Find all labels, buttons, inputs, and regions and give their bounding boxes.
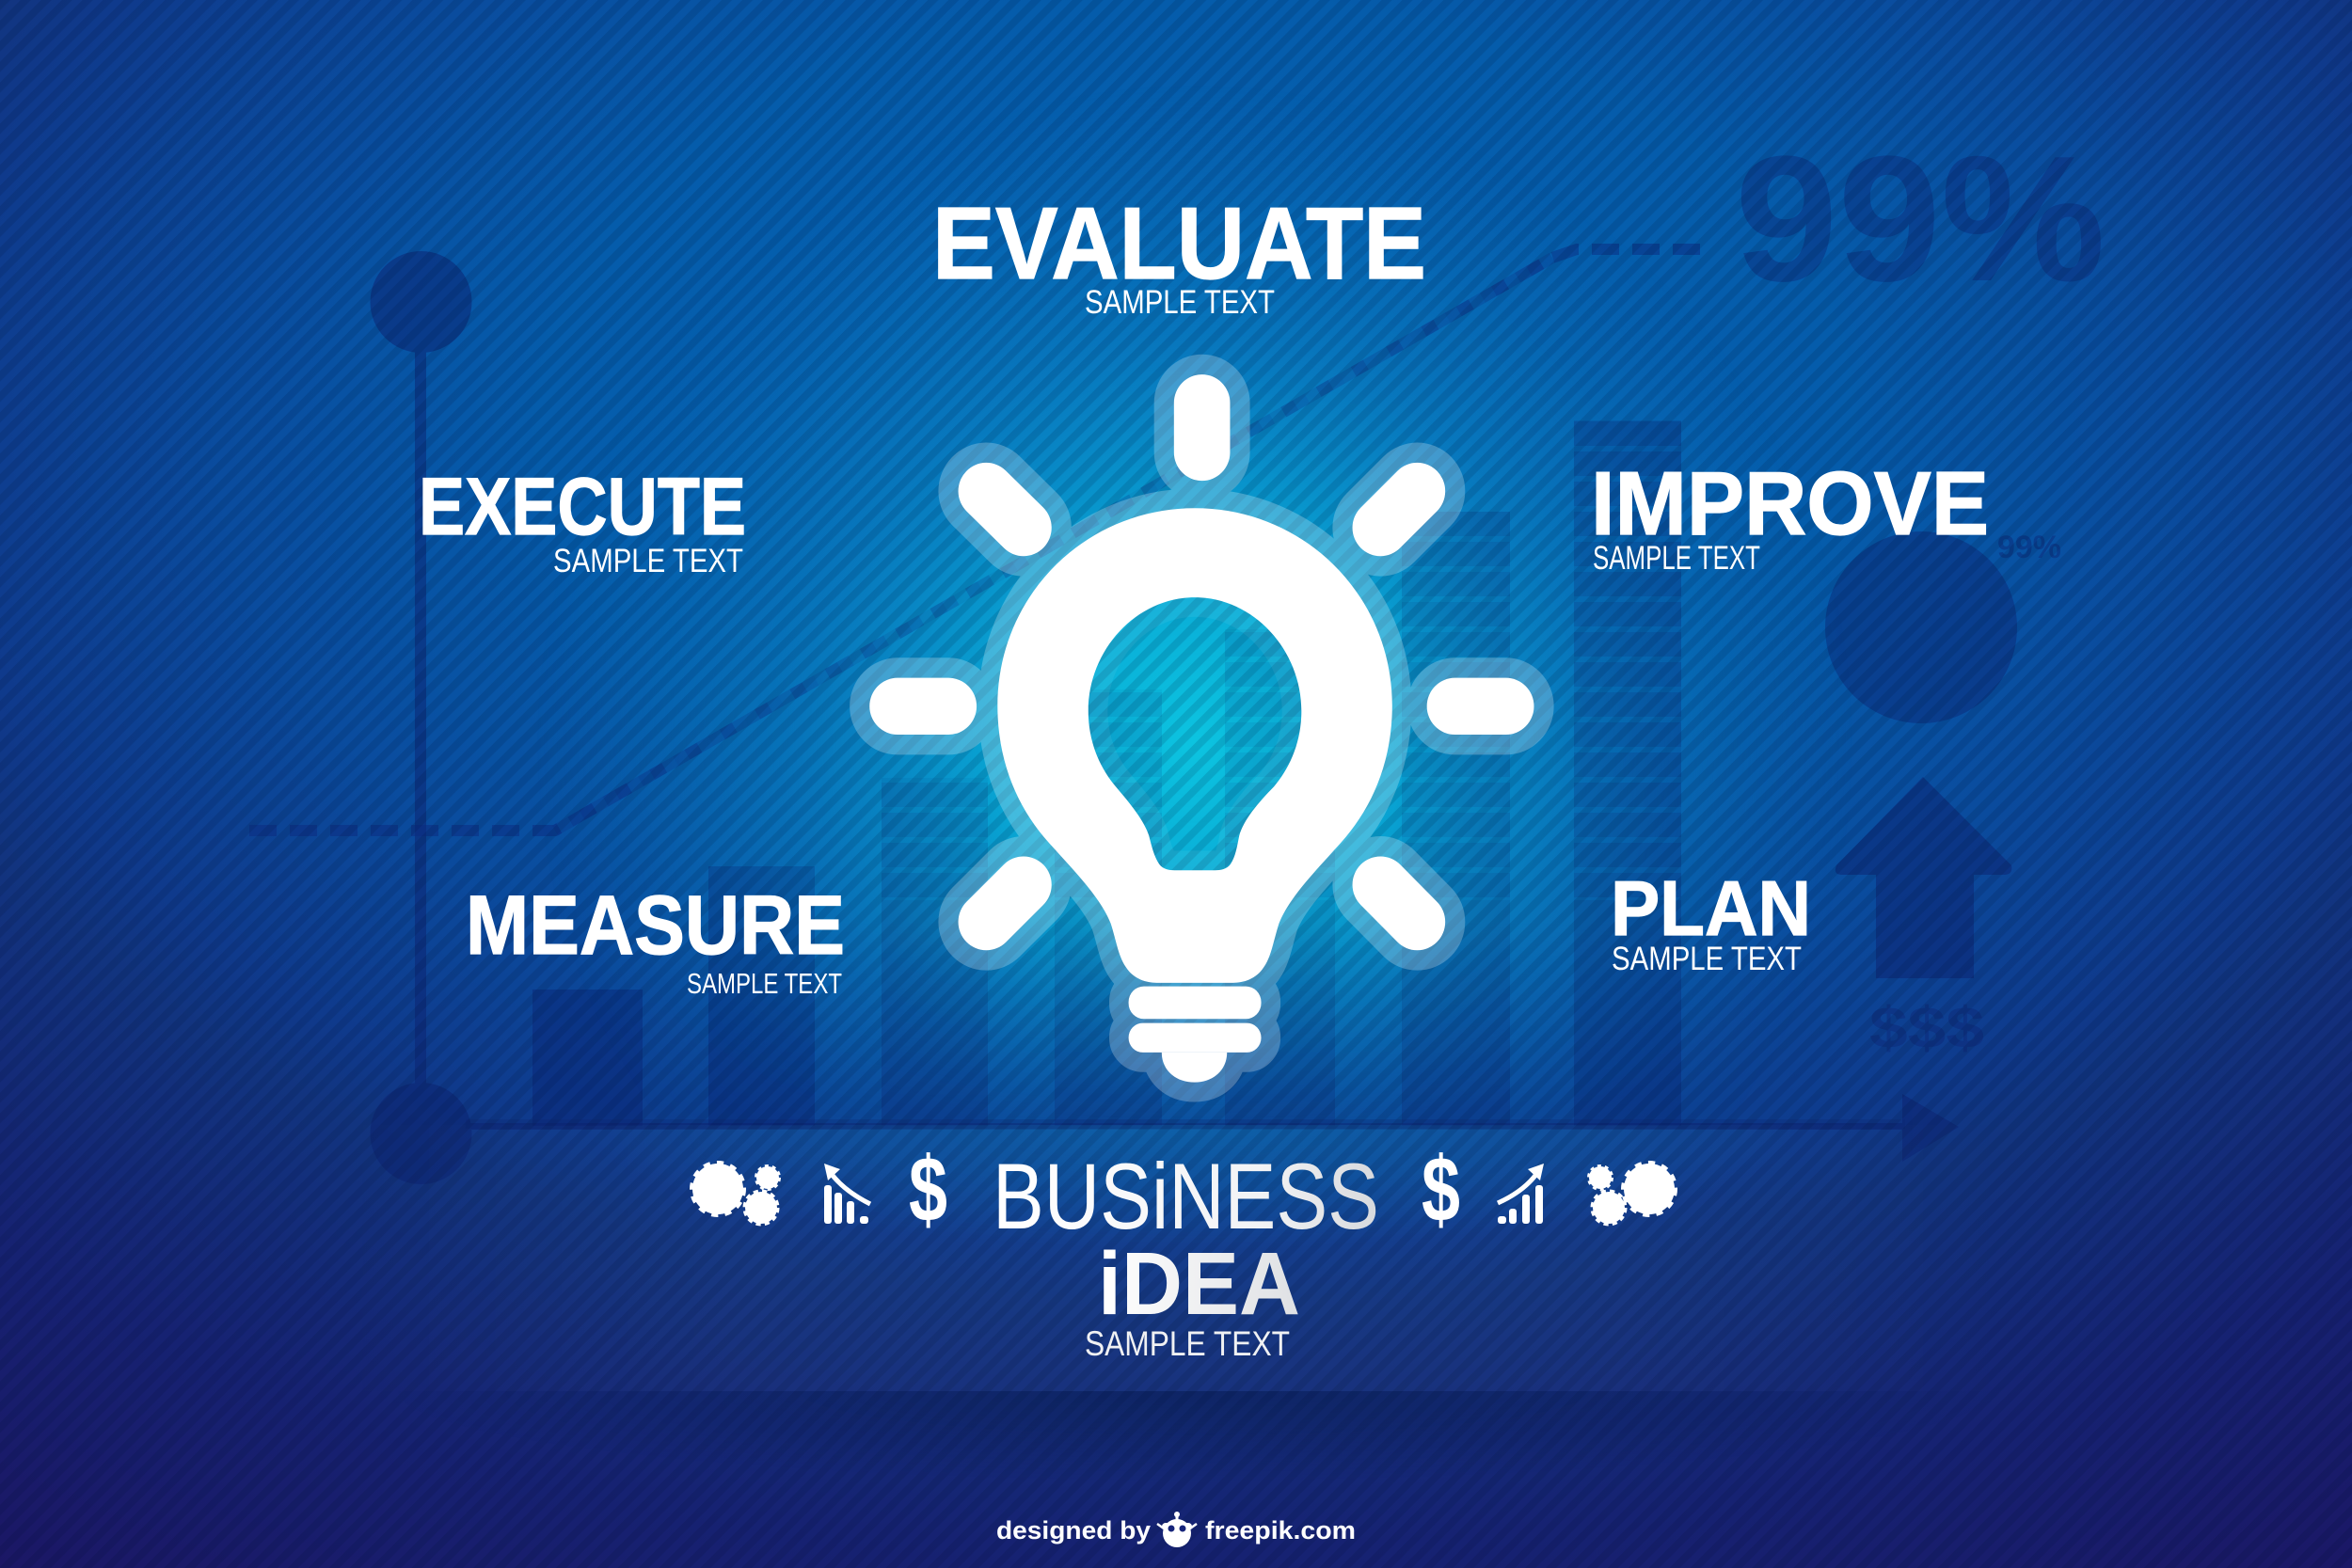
icon: falling chart (824, 1164, 870, 1224)
icon: left gears (692, 1164, 779, 1224)
heading: measure: MEASURE (466, 878, 845, 972)
big 99% watermark: 99% (1735, 119, 2106, 319)
dollars watermark: $$$ (1869, 996, 1984, 1061)
trend line shade over glow (555, 258, 1552, 831)
footer credit (996, 1512, 1356, 1547)
heading: execute (419, 462, 746, 579)
icon: freepik logo (1157, 1512, 1197, 1547)
dashed trend line (249, 249, 1709, 831)
bulb halo (898, 403, 1506, 1083)
band shadow (376, 1391, 2013, 1485)
light rays (898, 403, 1506, 922)
bulb inner ring (1089, 597, 1301, 870)
up arrow watermark (1836, 777, 2011, 978)
icon: rising chart (1498, 1164, 1544, 1224)
heading: execute: SAMPLE TEXT (553, 543, 743, 579)
heading: execute: EXECUTE (419, 462, 746, 552)
icon: right gears (1589, 1164, 1675, 1224)
icon: right dollar: $ (1422, 1137, 1460, 1241)
bottom band (329, 1119, 2023, 1391)
pie circle watermark (1825, 531, 2017, 723)
icon: left dollar: $ (909, 1137, 947, 1241)
central light glow (617, 223, 1740, 1125)
heading: evaluate: SAMPLE TEXT (1085, 284, 1275, 321)
title: business: BUSiNESS (993, 1144, 1379, 1248)
heading: improve: SAMPLE TEXT (1593, 540, 1760, 577)
small 99% watermark: 99% (1997, 530, 2061, 565)
heading: measure: SAMPLE TEXT (687, 967, 842, 1000)
footer credit: freepik.com (1205, 1516, 1356, 1544)
heading: plan: PLAN (1611, 864, 1811, 952)
bar chart shade over glow (532, 420, 1681, 1126)
heading: evaluate: EVALUATE (932, 186, 1426, 301)
background bar chart (532, 420, 1681, 1126)
heading: plan: SAMPLE TEXT (1612, 941, 1802, 977)
bulb body (997, 508, 1392, 983)
heading: improve: IMPROVE (1591, 453, 1989, 554)
subtitle: sample text: SAMPLE TEXT (1085, 1324, 1290, 1363)
footer credit: designed by (996, 1516, 1151, 1544)
title: idea: iDEA (1098, 1234, 1300, 1334)
bulb screw base (1129, 987, 1262, 1083)
icon: light bulb (898, 403, 1506, 1083)
background chart: axes and nodes (371, 251, 1959, 1184)
